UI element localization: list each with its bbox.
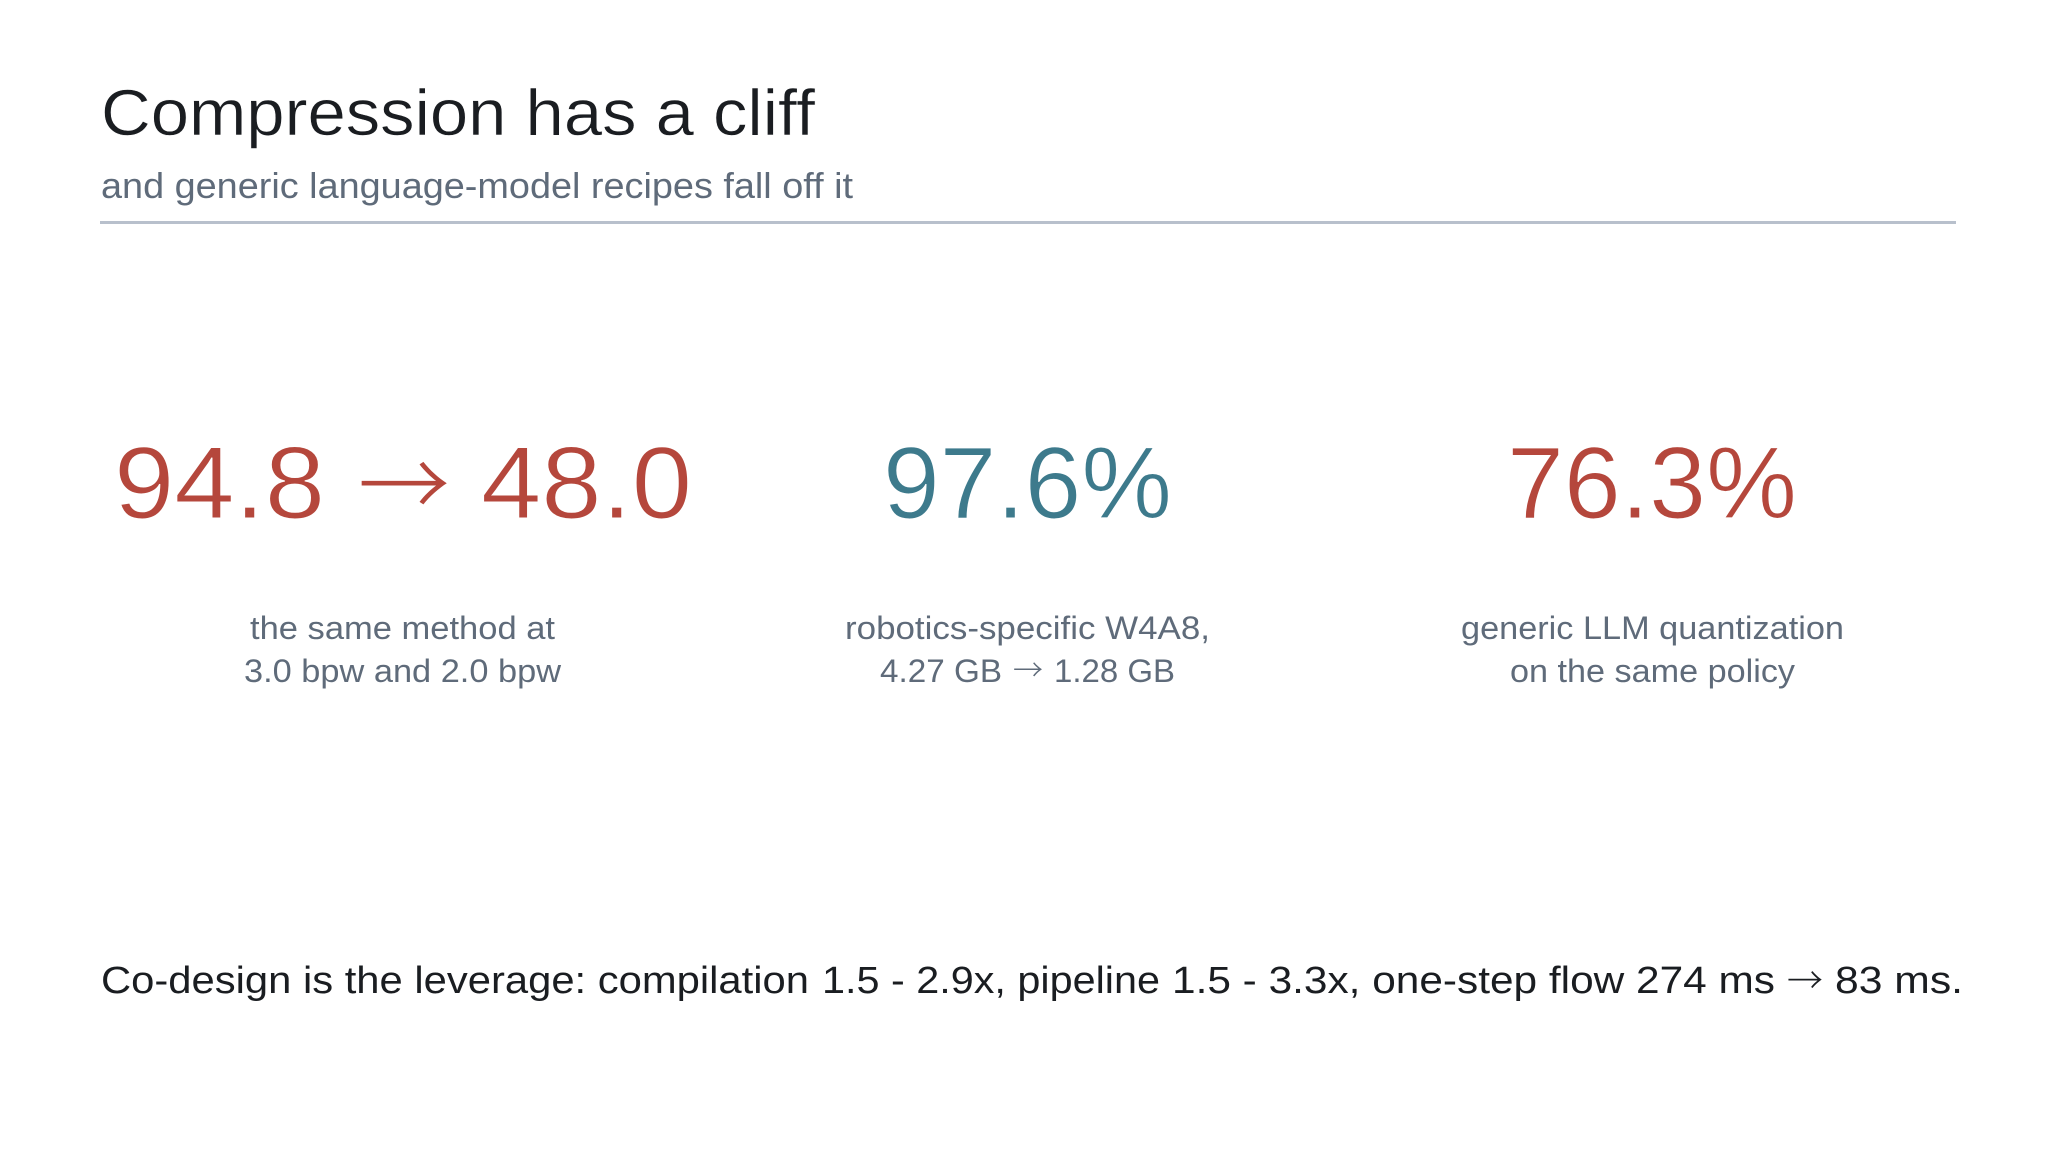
caption: generic LLM: generic LLM quantization: [1461, 610, 1844, 646]
stat value: 97.6%: 97.6%: [883, 426, 1172, 540]
caption: generic LLM: [1461, 610, 1844, 689]
stat value: 76.3%: 76.3%: [1507, 426, 1797, 540]
takeaway text: 1.5 - 2.9x, pipeline: [822, 960, 1160, 1002]
caption: W4A8: robotics-specific W4A8,: [845, 610, 1210, 646]
title: Compression has a cliff: [101, 76, 816, 149]
caption: W4A8: 4.27 GB: [880, 653, 1002, 689]
panel: W4A8 stat: [845, 426, 1210, 690]
panel: same method stat: [114, 412, 692, 689]
caption: same method: 3.0 bpw and 2.0 bpw: [244, 653, 562, 689]
takeaway text: 1.5 - 3.3x, one-step flow 274 ms: [1172, 960, 1775, 1002]
stat value: 94.8 to 48.0: 48.0: [481, 426, 692, 540]
caption: same method: [244, 610, 562, 689]
stat value: 94.8 to 48.0: →: [358, 412, 450, 545]
panel: generic LLM stat: [1461, 426, 1844, 689]
caption: W4A8: →: [1013, 646, 1043, 690]
takeaway text: 83 ms.: [1835, 960, 1963, 1002]
caption: W4A8: [845, 610, 1210, 690]
stat value: 94.8 to 48.0: 94.8: [114, 426, 325, 540]
takeaway text: Co-design is the leverage: compilation: [101, 960, 809, 1002]
takeaway text: [101, 952, 1963, 1004]
subtitle: and generic language-model recipes fall off it: [101, 165, 853, 206]
caption: W4A8: 1.28 GB: [1054, 653, 1175, 689]
caption: same method: the same method at: [250, 610, 555, 646]
caption: generic LLM: on the same policy: [1510, 653, 1795, 689]
stat value: 94.8 to 48.0: [114, 412, 692, 545]
takeaway text: →: [1787, 952, 1823, 1004]
